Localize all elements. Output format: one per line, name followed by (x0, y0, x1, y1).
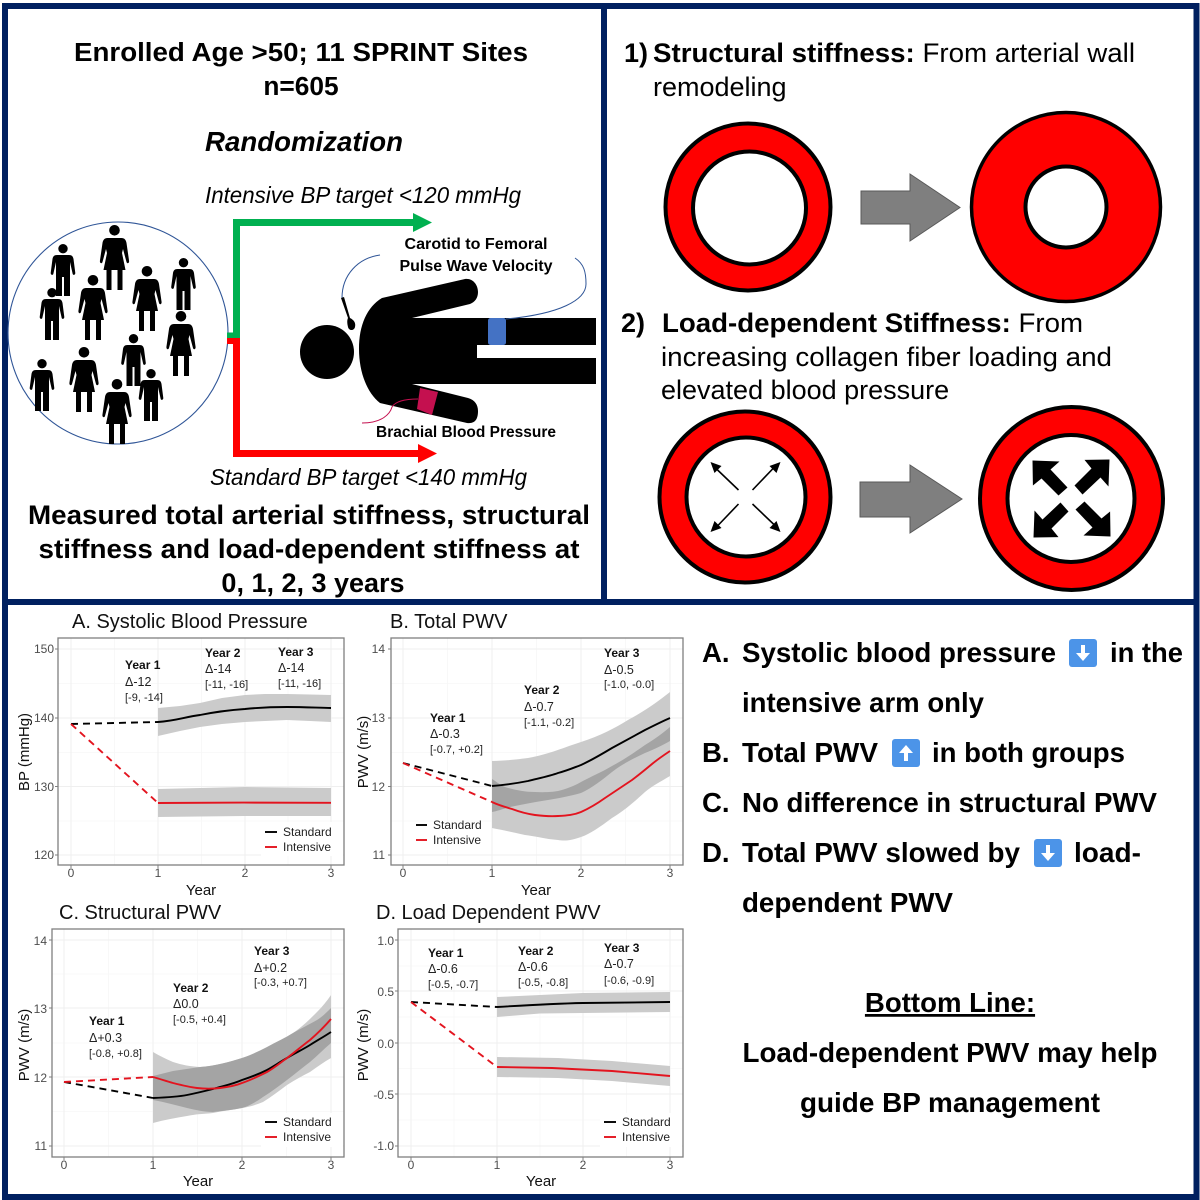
text: finding C: C. (702, 787, 730, 818)
chart: D load dependent PWV: PWV (m/s) (355, 1009, 372, 1081)
chart: C structural PWV: PWV (m/s) (16, 1009, 33, 1081)
icon: up arrow B (892, 739, 920, 767)
text: finding A: in the (1110, 637, 1183, 668)
chart: B total PWV: Year (521, 882, 551, 899)
text: finding A: A. (702, 637, 730, 668)
chart: B total PWV: Δ-0.5 (604, 663, 634, 677)
icon: high pressure artery ring (980, 407, 1163, 590)
chart: D load dependent PWV: 0.0 (377, 1037, 394, 1051)
chart: D load dependent PWV: 2 (580, 1158, 587, 1172)
chart: D load dependent PWV: -0.5 (373, 1088, 394, 1102)
chart: D load dependent PWV: Year 3 (604, 941, 640, 955)
chart: C structural PWV: 11 (35, 1139, 47, 1153)
chart: B total PWV: 13 (372, 711, 385, 725)
chart: B total PWV: Standard (433, 818, 482, 832)
chart: B total PWV: [-1.0, -0.0] (604, 679, 654, 691)
chart: C structural PWV: Year 2 (173, 981, 209, 995)
chart: D load dependent PWV: Δ-0.6 (518, 960, 548, 974)
icon: supine patient with cuffs (300, 255, 596, 423)
label: carotid to femoral PWV: Pulse Wave Velocity (400, 258, 553, 275)
chart: B total PWV: PWV (m/s) (355, 716, 372, 788)
text: finding A: Systolic blood pressure (742, 637, 1056, 668)
panel: stiffness mechanisms (621, 38, 1163, 590)
chart: B total PWV: [-0.7, +0.2] (430, 744, 483, 756)
text: finding D (702, 837, 1141, 918)
chart: A systolic blood pressure: 140 (34, 711, 54, 725)
chart: D load dependent PWV: [-0.5, -0.7] (428, 979, 478, 991)
chart: A systolic blood pressure: Standard (283, 825, 332, 839)
chart: C structural PWV: Standard (283, 1115, 332, 1129)
chart: B total PWV: Year 2 (524, 683, 560, 697)
chart: A systolic blood pressure: 0 (68, 866, 75, 880)
text: load-dependent stiffness definition: 2) (621, 308, 645, 338)
heading: randomization: Randomization (205, 126, 403, 157)
chart: D load dependent PWV: [-0.5, -0.8] (518, 977, 568, 989)
chart: C structural PWV: [-0.5, +0.4] (173, 1014, 226, 1026)
chart: B total PWV: 2 (578, 866, 585, 880)
chart: D load dependent PWV: 1.0 (377, 934, 394, 948)
text: bottom line message: Load-dependent PWV may help (742, 1037, 1158, 1068)
chart: B total PWV: Year 1 (430, 711, 466, 725)
arrow: standard arm (227, 338, 437, 463)
text: measurements: 0, 1, 2, 3 years (221, 568, 405, 598)
chart: C structural PWV: 0 (61, 1158, 68, 1172)
chart: A systolic blood pressure (16, 611, 344, 899)
icon: down arrow A (1069, 639, 1097, 667)
text: load-dependent stiffness definition: Load-dependent Stiffness: From (662, 308, 1083, 338)
chart: D load dependent PWV: Year 1 (428, 946, 464, 960)
panel: study design (8, 37, 596, 598)
chart: A systolic blood pressure: Intensive (283, 840, 331, 854)
arrow: remodeling progression (861, 174, 960, 241)
chart: C structural PWV: Year 3 (254, 944, 290, 958)
chart: C structural PWV: [-0.3, +0.7] (254, 977, 307, 989)
chart: A systolic blood pressure: Year (186, 882, 216, 899)
chart: A systolic blood pressure: 1 (155, 866, 162, 880)
heading: enrollment: Enrolled Age >50; 11 SPRINT Sites (74, 37, 528, 67)
chart: A systolic blood pressure: [-11, -16] (278, 678, 321, 690)
chart: A systolic blood pressure: Year 1 (125, 658, 161, 672)
chart: D load dependent PWV: 3 (667, 1158, 674, 1172)
icon: thickened artery ring (972, 112, 1160, 302)
chart: B total PWV: Intensive (433, 833, 481, 847)
panel: summary of findings (702, 637, 1183, 1118)
text: finding C: No difference in structural PWV (742, 787, 1158, 818)
text: measurements (28, 500, 590, 598)
chart: B total PWV: Δ-0.3 (430, 727, 460, 741)
chart: C structural PWV: Δ0.0 (173, 997, 199, 1011)
text: structural stiffness definition (624, 38, 1135, 102)
chart: B total PWV: B. Total PWV (390, 611, 508, 633)
panel: charts (16, 611, 683, 1190)
chart: A systolic blood pressure: Δ-14 (205, 662, 231, 676)
chart: A systolic blood pressure: 150 (34, 642, 54, 656)
chart: B total PWV: 1 (489, 866, 496, 880)
label: carotid to femoral PWV: Carotid to Femoral (404, 236, 548, 253)
chart: C structural PWV: Year (183, 1173, 213, 1190)
chart: D load dependent PWV: Δ-0.6 (428, 962, 458, 976)
chart: A systolic blood pressure: BP (mmHg) (16, 713, 33, 791)
chart: C structural PWV: Intensive (283, 1130, 331, 1144)
chart: C structural PWV: 2 (239, 1158, 246, 1172)
heading: enrollment: n=605 (263, 71, 339, 101)
chart: D load dependent PWV: Standard (622, 1115, 671, 1129)
heading: enrollment (74, 37, 528, 101)
chart: B total PWV: 14 (372, 642, 385, 656)
text: load-dependent stiffness definition (621, 308, 1112, 405)
chart: D load dependent PWV: Year (526, 1173, 556, 1190)
chart: D load dependent PWV (355, 902, 683, 1190)
text: finding D: dependent PWV (742, 887, 954, 918)
text: measurements: Measured total arterial stiffness, structural (28, 500, 590, 530)
text: finding D: D. (702, 837, 730, 868)
chart: A systolic blood pressure: Δ-12 (125, 675, 151, 689)
chart: C structural PWV: Δ+0.2 (254, 961, 287, 975)
chart: C structural PWV: 3 (328, 1158, 335, 1172)
label: intensive target: Intensive BP target <120 mmHg (205, 182, 521, 208)
chart: C structural PWV: [-0.8, +0.8] (89, 1048, 142, 1060)
chart: A systolic blood pressure: [-11, -16] (205, 679, 248, 691)
text: finding A: intensive arm only (742, 687, 985, 718)
icon: participants circle (8, 222, 228, 444)
chart: D load dependent PWV: Year 2 (518, 944, 554, 958)
arrow: intensive arm (227, 213, 432, 338)
text: finding D: load- (1074, 837, 1141, 868)
text: structural stiffness definition: remodeling (653, 72, 787, 102)
chart: B total PWV: 3 (667, 866, 674, 880)
chart: C structural PWV: C. Structural PWV (59, 902, 222, 924)
chart: B total PWV: Δ-0.7 (524, 700, 554, 714)
chart: A systolic blood pressure: 130 (34, 780, 54, 794)
chart: D load dependent PWV: D. Load Dependent PWV (376, 902, 601, 924)
text: bottom line message: guide BP management (800, 1087, 1100, 1118)
text: measurements: stiffness and load-dependent stiffness at (38, 534, 580, 564)
text: finding A (702, 637, 1183, 718)
chart: D load dependent PWV: Δ-0.7 (604, 957, 634, 971)
chart: C structural PWV (16, 902, 344, 1190)
chart: A systolic blood pressure: [-9, -14] (125, 692, 163, 704)
chart: D load dependent PWV: 0 (408, 1158, 415, 1172)
icon: low pressure artery ring (660, 412, 830, 582)
text: load-dependent stiffness definition: elevated blood pressure (661, 375, 949, 405)
chart: B total PWV (355, 611, 683, 899)
chart: C structural PWV: Δ+0.3 (89, 1031, 122, 1045)
chart: A systolic blood pressure: A. Systolic Blood Pressure (72, 611, 308, 633)
chart: A systolic blood pressure: Year 2 (205, 646, 241, 660)
chart: A systolic blood pressure: 3 (328, 866, 335, 880)
chart: A systolic blood pressure: 120 (34, 848, 54, 862)
text: finding B: Total PWV (742, 737, 879, 768)
text: finding B: in both groups (932, 737, 1125, 768)
chart: A systolic blood pressure: Δ-14 (278, 661, 304, 675)
chart: B total PWV: 11 (373, 848, 385, 862)
chart: A systolic blood pressure: Year 3 (278, 645, 314, 659)
chart: C structural PWV: 14 (34, 934, 47, 948)
chart: D load dependent PWV: 0.5 (377, 985, 394, 999)
chart: D load dependent PWV: [-0.6, -0.9] (604, 975, 654, 987)
chart: B total PWV: Year 3 (604, 646, 640, 660)
text: finding B: B. (702, 737, 730, 768)
label: carotid to femoral PWV (400, 236, 553, 275)
heading: bottom line: Bottom Line: (865, 987, 1035, 1018)
chart: A systolic blood pressure: 2 (242, 866, 249, 880)
text: structural stiffness definition: 1) (624, 38, 648, 68)
icon: normal artery ring (666, 124, 830, 290)
text: structural stiffness definition: Structural stiffness: From arterial wall (653, 38, 1135, 68)
chart: B total PWV: 12 (372, 780, 385, 794)
chart: C structural PWV: 13 (34, 1002, 47, 1016)
label: standard target: Standard BP target <140 mmHg (210, 464, 527, 490)
chart: D load dependent PWV: 1 (494, 1158, 501, 1172)
text: bottom line message (742, 1037, 1158, 1118)
icon: down arrow D (1034, 839, 1062, 867)
text: finding B (702, 737, 1125, 768)
chart: D load dependent PWV: Intensive (622, 1130, 670, 1144)
chart: C structural PWV: 12 (34, 1071, 47, 1085)
text: load-dependent stiffness definition: increasing collagen fiber loading and (661, 342, 1112, 372)
chart: C structural PWV: Year 1 (89, 1014, 125, 1028)
chart: D load dependent PWV: -1.0 (373, 1139, 394, 1153)
chart: B total PWV: [-1.1, -0.2] (524, 717, 574, 729)
label: brachial blood pressure: Brachial Blood Pressure (376, 424, 556, 441)
chart: C structural PWV: 1 (150, 1158, 157, 1172)
arrow: pressure progression (860, 465, 962, 533)
text: finding D: Total PWV slowed by (742, 837, 1021, 868)
chart: B total PWV: 0 (400, 866, 407, 880)
